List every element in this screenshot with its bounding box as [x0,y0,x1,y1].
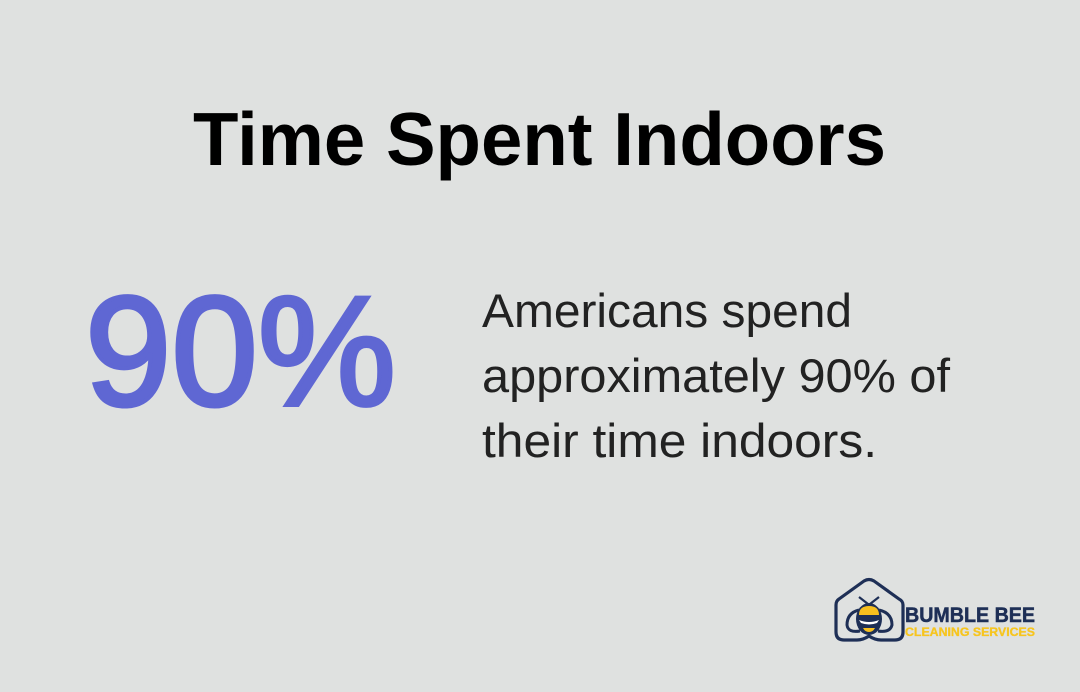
logo: Bumble Bee Cleaning Services [836,580,1035,640]
description text: approximately 90% of [482,349,951,402]
description text: their time indoors. [482,414,877,467]
icon: house outline [836,580,903,640]
title: Time Spent Indoors [193,97,886,181]
description text: Americans spend [482,284,852,337]
description text [482,284,951,467]
icon: bee [847,597,892,635]
logo tagline: CLEANING SERVICES [905,627,1035,639]
logo wordmark: BUMBLE BEE [905,604,1035,627]
big statistic: 90%: 90% [85,265,396,439]
